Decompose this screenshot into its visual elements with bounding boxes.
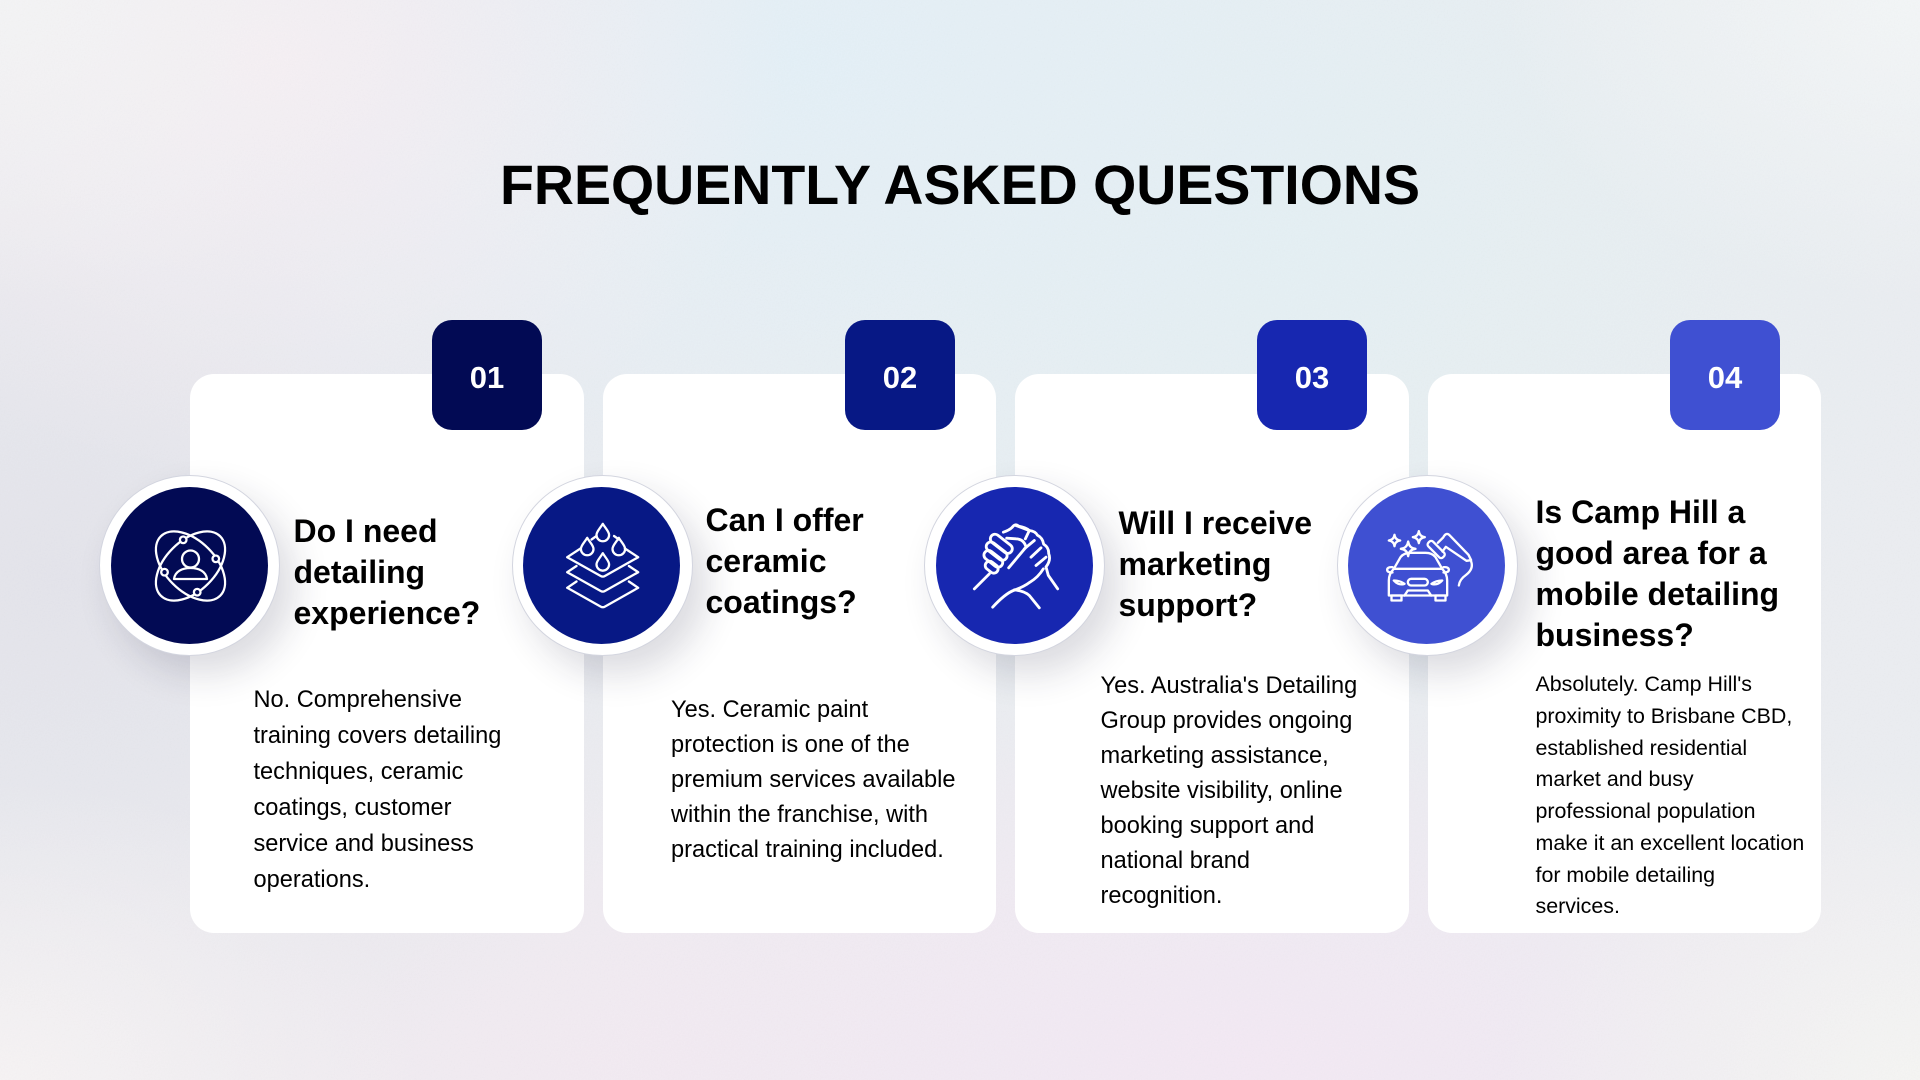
panel: card 4 background — [1428, 374, 1821, 933]
panel: card 2 background — [602, 374, 996, 933]
text: answer 2: within the franchise, with — [671, 802, 928, 828]
number badge 04 — [1670, 320, 1780, 430]
panel: card 1 background — [190, 374, 584, 933]
icon: clasped hands — [924, 475, 1105, 656]
text: answer 4: professional population — [1536, 799, 1756, 823]
text: answer 4: proximity to Brisbane CBD, — [1536, 704, 1792, 728]
number badge 04: 04 — [1708, 360, 1742, 395]
text: answer 3: recognition. — [1100, 883, 1222, 909]
icon: layered coating with drops — [512, 475, 692, 656]
number badge 02 — [845, 320, 955, 430]
heading: question 2: ceramic — [706, 543, 826, 579]
text: answer 1: coatings, customer — [254, 795, 452, 821]
heading: question 1 — [294, 513, 480, 631]
text: answer 4: services. — [1536, 894, 1620, 918]
text: answer 4: market and busy — [1536, 767, 1694, 791]
heading: question 2: Can I offer — [706, 502, 864, 538]
panel: card 3 background — [1015, 374, 1408, 933]
text: answer 3: national brand — [1100, 848, 1250, 874]
heading: question 1: experience? — [294, 595, 480, 631]
heading: question 4: good area for a — [1536, 535, 1767, 571]
text: answer 4: established residential — [1536, 736, 1747, 760]
text: answer 3: website visibility, online — [1100, 778, 1343, 804]
heading: question 3: Will I receive — [1118, 505, 1312, 541]
number badge 03: 03 — [1295, 360, 1329, 395]
text: answer 2: Yes. Ceramic paint — [671, 696, 868, 722]
text: answer 3 — [1100, 672, 1357, 909]
text: answer 1: techniques, ceramic — [254, 759, 463, 785]
text: answer 3: booking support and — [1100, 813, 1314, 839]
text: answer 4: for mobile detailing — [1536, 862, 1715, 886]
number badge 02: 02 — [883, 360, 917, 395]
heading: question 3: marketing — [1118, 546, 1271, 582]
text: answer 3: Group provides ongoing — [1100, 708, 1352, 734]
number badge 01 — [432, 320, 542, 430]
number badge 01: 01 — [470, 360, 504, 395]
icon: car with polisher — [1336, 475, 1518, 656]
text: answer 1: training covers detailing — [254, 723, 501, 749]
heading: question 3 — [1118, 505, 1312, 623]
text: answer 4: Absolutely. Camp Hill's — [1536, 672, 1752, 696]
heading: question 4 — [1536, 494, 1779, 653]
heading: question 4: mobile detailing — [1536, 576, 1779, 612]
text: answer 2: premium services available — [671, 767, 956, 793]
heading: question 4: Is Camp Hill a — [1536, 494, 1745, 530]
text: answer 4 — [1536, 672, 1804, 918]
text: answer 1 — [254, 687, 501, 893]
number badge 03 — [1257, 320, 1367, 430]
text: answer 1: No. Comprehensive — [254, 687, 462, 713]
heading: question 1: detailing — [294, 554, 425, 590]
text: answer 4: make it an excellent location — [1536, 831, 1804, 855]
text: answer 2: protection is one of the — [671, 732, 910, 758]
text: answer 2: practical training included. — [671, 837, 944, 863]
text: answer 3: Yes. Australia's Detailing — [1100, 672, 1357, 698]
text: answer 1: service and business — [254, 831, 474, 857]
heading: question 2: coatings? — [706, 584, 857, 620]
title: FREQUENTLY ASKED QUESTIONS — [500, 154, 1420, 216]
heading: question 4: business? — [1536, 617, 1694, 653]
text: answer 2 — [671, 696, 956, 863]
text: answer 3: marketing assistance, — [1100, 743, 1329, 769]
text: answer 1: operations. — [254, 867, 370, 893]
heading: question 2 — [706, 502, 864, 620]
heading: question 1: Do I need — [294, 513, 438, 549]
icon: person with orbits — [99, 475, 280, 656]
heading: question 3: support? — [1118, 587, 1257, 623]
